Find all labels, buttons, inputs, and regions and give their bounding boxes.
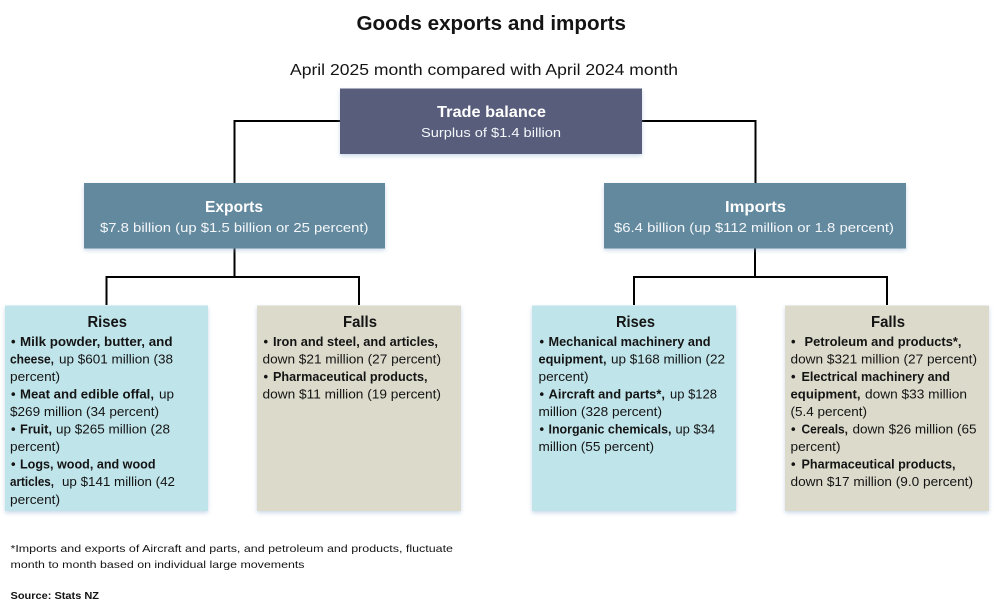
- item: pharmaceutical products: [790, 456, 973, 489]
- item: milk powder: up $601 million (38: [59, 352, 173, 366]
- item: cereals: •: [791, 422, 796, 436]
- heading: imports: Imports: [725, 199, 786, 216]
- connectors: exports to rises and falls: [106, 248, 359, 305]
- item: mechanical machinery: equipment,: [538, 352, 606, 366]
- panel: exports falls: [257, 306, 461, 511]
- item: iron and steel: down $21 million (27 percent): [262, 352, 441, 366]
- item: logs: articles,: [10, 474, 54, 489]
- item: aircraft and parts: •: [540, 386, 544, 402]
- item: logs: [10, 456, 175, 507]
- item: petroleum: •: [791, 334, 796, 349]
- title: Goods exports and imports: [356, 12, 626, 35]
- panel: exports rises: [5, 306, 208, 511]
- item: electrical machinery: (5.4 percent): [790, 404, 867, 419]
- item: electrical machinery: down $33 million: [865, 386, 967, 402]
- item: fruit: Fruit,: [20, 422, 52, 436]
- item: iron and steel: •: [264, 334, 268, 349]
- panel: imports rises: [532, 306, 736, 511]
- footnote: [10, 543, 453, 571]
- item: inorganic chemicals: Inorganic chemicals,: [548, 422, 672, 436]
- item: milk powder: Milk powder, butter, and: [20, 334, 173, 349]
- value: imports summary: $6.4 billion (up $112 million or 1.8 percent): [614, 220, 894, 235]
- item: milk powder: •: [11, 334, 16, 349]
- item: petroleum: [790, 334, 977, 366]
- item: aircraft and parts: [538, 386, 717, 419]
- item: cereals: percent): [790, 439, 840, 454]
- footnote: month to month based on individual large movements: [10, 559, 304, 571]
- item: mechanical machinery: [538, 334, 725, 384]
- item: iron and steel: Iron and steel, and articles,: [273, 334, 438, 349]
- panel: trade balance: [340, 88, 642, 154]
- item: fruit: [10, 422, 170, 454]
- item: fruit: up $265 million (28: [56, 422, 170, 436]
- panel: exports: [84, 183, 385, 248]
- item: inorganic chemicals: up $34: [676, 422, 715, 436]
- item: mechanical machinery: percent): [538, 369, 588, 384]
- item: inorganic chemicals: •: [540, 422, 544, 436]
- value: surplus: Surplus of $1.4 billion: [421, 125, 561, 140]
- item: pharmaceutical products: Pharmaceutical products,: [802, 456, 956, 472]
- item: milk powder: [10, 334, 173, 384]
- item: mechanical machinery: up $168 million (22: [611, 352, 725, 366]
- item: meat: [10, 386, 174, 419]
- connectors: imports to rises and falls: [634, 248, 887, 305]
- subtitle: April 2025 month compared with April 2024 month: [290, 62, 678, 79]
- item: fruit: •: [11, 422, 16, 436]
- heading: falls: Falls: [343, 314, 377, 331]
- item: pharmaceutical products: [262, 369, 441, 402]
- item: meat: Meat and edible offal,: [20, 386, 154, 402]
- item: aircraft and parts: up $128: [670, 386, 717, 402]
- item: inorganic chemicals: million (55 percent): [538, 439, 654, 454]
- item: mechanical machinery: •: [540, 334, 544, 349]
- item: petroleum: down $321 million (27 percent): [790, 352, 977, 366]
- footnote: *Imports and exports of Aircraft and parts, and petroleum and products, fluctuate: [10, 543, 453, 555]
- value: exports summary: $7.8 billion (up $1.5 billion or 25 percent): [100, 220, 368, 235]
- item: pharmaceutical products: Pharmaceutical products,: [273, 369, 428, 384]
- item: logs: Logs, wood, and wood: [20, 456, 156, 472]
- panel: imports: [604, 183, 906, 248]
- item: aircraft and parts: Aircraft and parts*,: [548, 386, 665, 402]
- item: inorganic chemicals: [538, 422, 715, 454]
- item: logs: percent): [10, 492, 60, 507]
- item: electrical machinery: •: [791, 369, 796, 384]
- item: pharmaceutical products: •: [264, 369, 268, 384]
- source: Source: Stats NZ: [10, 590, 100, 602]
- item: aircraft and parts: million (328 percent): [538, 404, 662, 419]
- heading: exports: Exports: [205, 199, 263, 216]
- connectors: trade balance to exports and imports: [234, 121, 756, 183]
- item: cereals: down $26 million (65: [852, 422, 976, 436]
- item: cereals: Cereals,: [802, 422, 848, 436]
- item: electrical machinery: [790, 369, 967, 419]
- item: pharmaceutical products: •: [791, 456, 796, 472]
- item: electrical machinery: equipment,: [790, 386, 860, 402]
- panel: imports falls: [785, 306, 989, 511]
- heading: trade balance: Trade balance: [437, 104, 546, 121]
- item: milk powder: cheese,: [10, 352, 54, 366]
- item: logs: •: [11, 456, 16, 472]
- item: mechanical machinery: Mechanical machinery and: [548, 334, 711, 349]
- item: fruit: percent): [10, 439, 60, 454]
- item: petroleum: Petroleum and products*,: [804, 334, 962, 349]
- item: meat: •: [11, 386, 16, 402]
- item: pharmaceutical products: down $11 million (19 percent): [262, 386, 441, 402]
- item: pharmaceutical products: down $17 million (9.0 percent): [790, 474, 973, 489]
- item: cereals: [790, 422, 976, 454]
- item: electrical machinery: Electrical machinery and: [802, 369, 950, 384]
- heading: rises: Rises: [616, 314, 655, 331]
- item: logs: up $141 million (42: [62, 474, 175, 489]
- heading: falls: Falls: [871, 314, 905, 331]
- item: iron and steel: [262, 334, 441, 366]
- item: meat: $269 million (34 percent): [10, 404, 159, 419]
- item: meat: up: [159, 386, 174, 402]
- item: milk powder: percent): [10, 369, 60, 384]
- heading: rises: Rises: [88, 314, 127, 331]
